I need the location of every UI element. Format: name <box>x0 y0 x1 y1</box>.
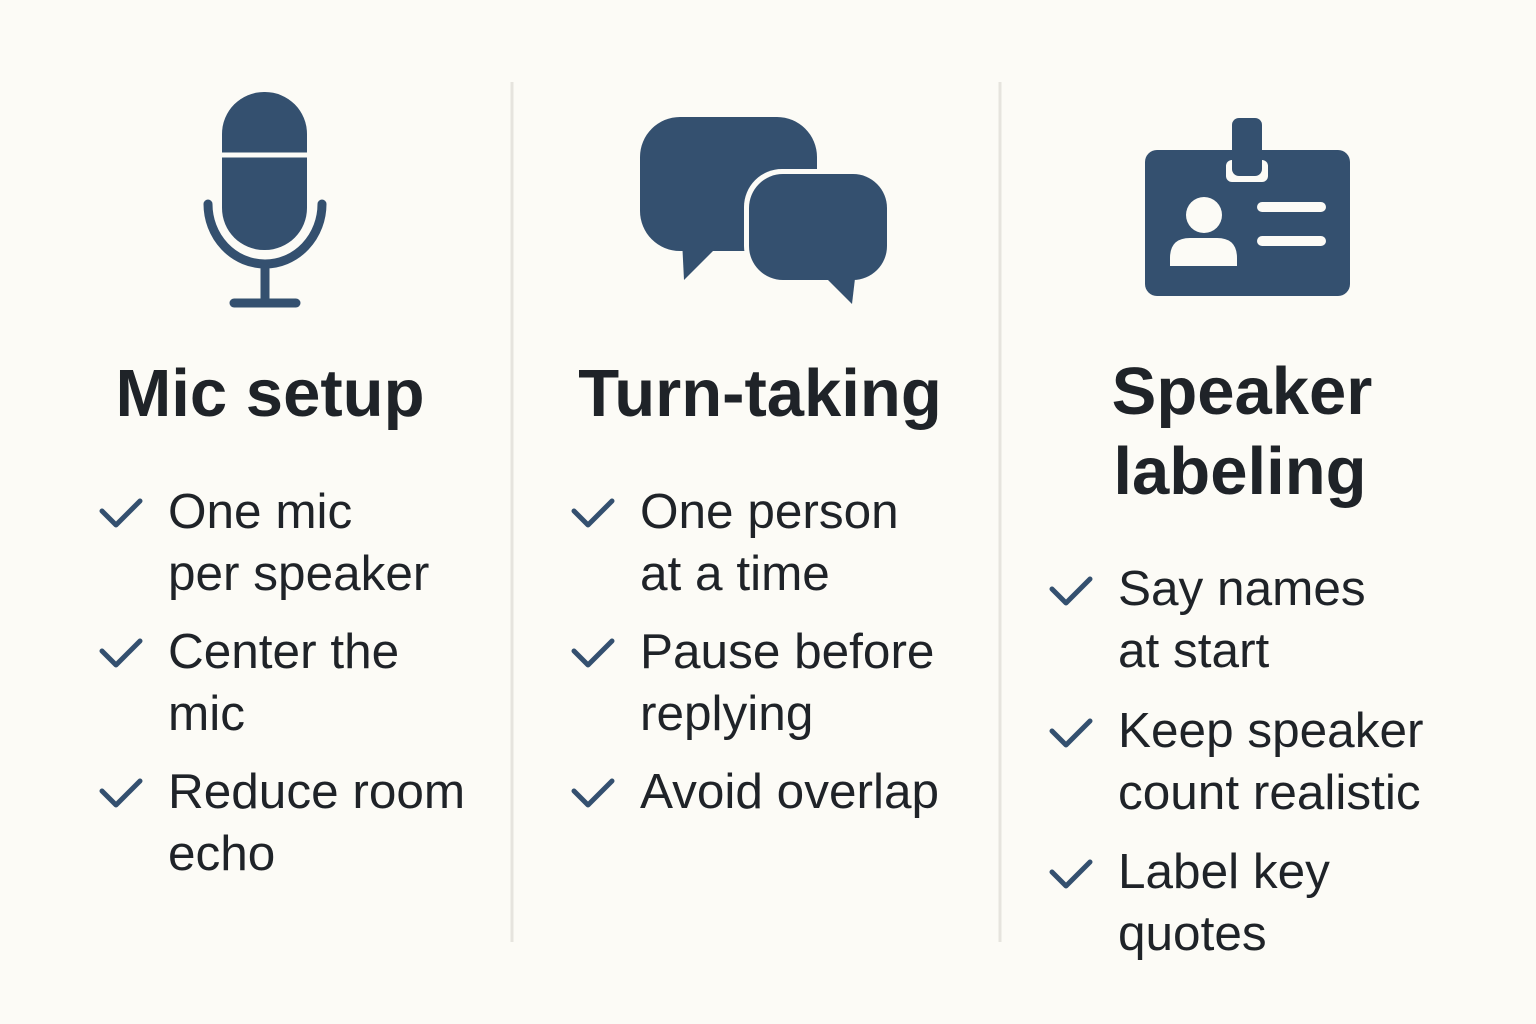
checklist: turn-taking: Pause before <box>640 624 934 679</box>
checklist: speaker labeling: quotes <box>1118 906 1267 961</box>
heading: Speaker labeling: labeling <box>1113 434 1367 509</box>
checklist: speaker labeling: Say names <box>1118 561 1366 616</box>
heading: Turn-taking: Turn-taking <box>578 356 942 431</box>
checklist: speaker labeling: count realistic <box>1118 765 1421 820</box>
icon: speech bubbles <box>640 117 891 304</box>
checklist: mic setup: echo <box>168 826 275 881</box>
icon: microphone <box>208 92 322 303</box>
checklist: turn-taking <box>574 484 939 819</box>
icon: ID badge <box>1145 118 1350 296</box>
checklist: turn-taking: replying <box>640 686 813 741</box>
panel: turn-taking <box>574 117 942 819</box>
checklist: speaker labeling: Keep speaker <box>1118 703 1423 758</box>
checklist: turn-taking: Avoid overlap <box>640 764 939 819</box>
checklist: mic setup: per speaker <box>168 546 429 601</box>
checklist: turn-taking: at a time <box>640 546 830 601</box>
heading: Speaker labeling <box>1112 354 1372 509</box>
heading: Speaker labeling: Speaker <box>1112 354 1372 429</box>
checklist: speaker labeling: at start <box>1118 623 1270 678</box>
panel: speaker labeling <box>1052 118 1423 961</box>
checklist: mic setup: One mic <box>168 484 352 539</box>
heading: Mic setup: Mic setup <box>116 356 424 431</box>
checklist: mic setup: mic <box>168 686 245 741</box>
checklist: speaker labeling <box>1052 561 1423 961</box>
panel: mic setup <box>102 92 465 881</box>
checklist: turn-taking: One person <box>640 484 899 539</box>
checklist: mic setup: Center the <box>168 624 399 679</box>
checklist: mic setup: Reduce room <box>168 764 465 819</box>
checklist: speaker labeling: Label key <box>1118 844 1330 899</box>
checklist: mic setup <box>102 484 465 881</box>
